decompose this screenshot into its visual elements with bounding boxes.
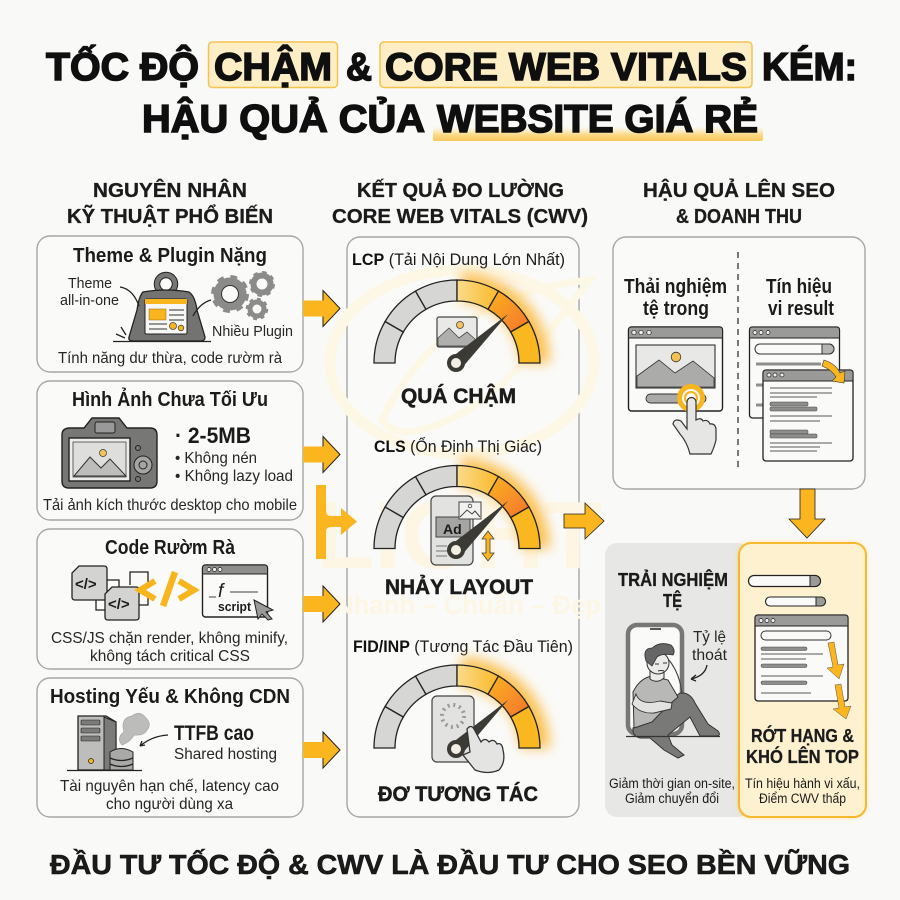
- arrow: to phone: [691, 665, 707, 681]
- panel: bad experience: Tỷ lệ: [693, 629, 726, 646]
- panel content: images: Hình Ảnh Chưa Tối Ưu: [72, 388, 268, 411]
- panel content: code: [51, 537, 288, 665]
- heading: causes column: KỸ THUẬT PHỔ BIẾN: [67, 204, 273, 228]
- icon: phone: [628, 625, 682, 734]
- panel: ranking drop: Điểm CWV thấp: [759, 791, 846, 806]
- arrow: cwv to consequences: [564, 503, 604, 539]
- icon: search result windows: [750, 327, 853, 461]
- panel: bad experience: TRẢI NGHIỆM: [618, 569, 728, 590]
- heading: cwv column: [332, 178, 588, 228]
- panel content: code: không tách critical CSS: [90, 648, 250, 665]
- panel content: images: • Không nén: [175, 450, 257, 467]
- panel: seo consequences: vi result: [768, 298, 834, 320]
- title: CORE WEB VITALS: [385, 46, 747, 89]
- panel: seo consequences: Thải nghiệm: [624, 276, 727, 298]
- watermark logo: LIGHT: [316, 482, 602, 589]
- far leg and hip: [633, 693, 719, 758]
- panel: causes 4 background: [37, 678, 303, 817]
- highlight box: chậm: [208, 42, 338, 88]
- heading: causes column: NGUYÊN NHÂN: [93, 178, 247, 202]
- face: [647, 652, 669, 674]
- panel content: code: Code Rườm Rà: [105, 537, 236, 559]
- heading: cwv column: KẾT QUẢ ĐO LƯỜNG: [357, 178, 564, 202]
- panel: causes 2 background: [37, 381, 303, 520]
- icon: orange code brackets: [140, 572, 194, 606]
- title: WEBSITE GIÁ RẺ: [437, 97, 758, 141]
- watermark logo: Nhanh – Chuẩn – Đẹp: [335, 590, 601, 620]
- arrow: down to outcomes: [789, 489, 825, 538]
- panel content: code: CSS/JS chặn render, không minify,: [51, 630, 288, 647]
- title: [46, 42, 857, 141]
- gauge section: LCP: QUÁ CHẬM: [401, 383, 516, 408]
- icon: vertical double arrow: [482, 531, 494, 561]
- highlight box: core web vitals: [380, 42, 752, 88]
- panel: bad experience: thoát: [692, 647, 728, 664]
- title: KÉM:: [762, 45, 857, 89]
- panel: ranking drop: RỚT HẠNG &: [751, 725, 854, 746]
- panel: ranking drop: KHÓ LÊN TOP: [746, 746, 859, 767]
- panel content: images: [43, 388, 297, 514]
- panel content: hosting: Shared hosting: [174, 746, 277, 763]
- icon: tapping hand: [463, 726, 504, 772]
- panel: core web vitals background: [347, 237, 579, 817]
- panel content: hosting: Tài nguyên hạn chế, latency cao: [60, 778, 279, 795]
- facial features: [655, 663, 667, 671]
- arrow: code to cwv: [303, 586, 340, 622]
- raised arm: [669, 660, 682, 694]
- icon: server with smoke and database: [67, 713, 168, 770]
- gauge section: CLS: NHẢY LAYOUT: [385, 574, 533, 599]
- gauge: CLS: [374, 466, 540, 565]
- gauge section: LCP: [352, 251, 565, 408]
- panel content: theme and plugin: [58, 245, 293, 367]
- icon: document with ad: Ad: [443, 521, 462, 537]
- title: HẬU QUẢ CỦA: [142, 97, 425, 141]
- panel content: theme and plugin: all-in-one: [60, 292, 119, 309]
- underline highlight: website giá rẻ: [433, 126, 763, 141]
- shirt torso: [633, 676, 678, 728]
- icon: code files: </>: [108, 596, 130, 613]
- panel: seo consequences: [613, 237, 865, 489]
- gauge section: FID/INP: ĐƠ TƯƠNG TÁC: [378, 781, 538, 806]
- icon: gears: [214, 273, 273, 318]
- gauge section: FID/INP: [353, 638, 573, 806]
- gauge section: CLS: CLS (Ổn Định Thị Giác): [374, 437, 542, 456]
- panel content: images: • Không lazy load: [175, 468, 293, 485]
- panel: bad experience: [605, 543, 750, 817]
- arrow: theme to cwv: [303, 290, 340, 326]
- panel: bad experience: Giảm thời gian on-site,: [609, 776, 735, 791]
- icon: loading panel: [432, 696, 474, 762]
- panel content: theme and plugin: Nhiều Plugin: [212, 323, 293, 340]
- title: &: [346, 46, 372, 89]
- icon: falling yellow arrows: [827, 642, 851, 719]
- gauge section: LCP: LCP (Tải Nội Dung Lớn Nhất): [352, 251, 565, 269]
- panel content: theme and plugin: Tính năng dư thừa, code rườm rà: [58, 350, 282, 367]
- panel: ranking drop: Tín hiệu hành vi xấu,: [745, 776, 860, 791]
- title: CHẬM: [214, 45, 332, 89]
- panel content: hosting: cho người dùng xa: [106, 796, 233, 813]
- icon: code files: </>: [75, 576, 97, 593]
- panel content: hosting: TTFB cao: [174, 722, 254, 745]
- icon: results window: [755, 615, 848, 701]
- panel: seo consequences: tệ trong: [643, 298, 709, 320]
- arrow: merging bracket to cwv: [316, 485, 357, 559]
- heading: consequences column: [643, 178, 835, 228]
- panel content: images: · 2-5MB: [175, 423, 251, 448]
- hair: [645, 644, 674, 666]
- gauge section: FID/INP: FID/INP (Tương Tác Đầu Tiên): [353, 638, 573, 656]
- arrow: images to cwv: [303, 436, 340, 472]
- icon: script window: script: [218, 600, 252, 614]
- icon: script window: f: [218, 581, 225, 602]
- panel: ranking drop: [738, 543, 866, 817]
- arrow: hosting to cwv: [303, 732, 340, 768]
- icon: image: [437, 317, 477, 347]
- gauge section: CLS: [374, 437, 542, 599]
- panel content: theme and plugin: Theme: [68, 275, 112, 292]
- icon: search bars: [748, 576, 826, 606]
- icon: script window: [202, 565, 273, 620]
- panel content: images: Tải ảnh kích thước desktop cho mobile: [43, 497, 297, 514]
- icon: weight: [113, 275, 211, 342]
- heading: cwv column: CORE WEB VITALS (CWV): [332, 205, 588, 228]
- resting arm: [632, 694, 672, 713]
- heading: causes column: [67, 178, 273, 228]
- gauge: FID/INP: [374, 665, 540, 772]
- panel: bad experience: TỆ: [663, 590, 682, 611]
- icon: browser with tap: [628, 327, 722, 454]
- panel content: theme and plugin: Theme & Plugin Nặng: [73, 245, 267, 267]
- icon: code files: [72, 566, 148, 620]
- panel: bad experience: Giảm chuyển đổi: [625, 791, 719, 806]
- panel content: hosting: Hosting Yếu & Không CDN: [50, 686, 290, 708]
- title: TỐC ĐỘ: [46, 44, 199, 89]
- icon: sad person sitting: [626, 644, 720, 758]
- panel: causes 3 background: [37, 529, 303, 669]
- panel: causes 1 background: [37, 236, 303, 372]
- heading: consequences column: HẬU QUẢ LÊN SEO: [643, 178, 835, 202]
- neck: [650, 668, 664, 681]
- panel content: hosting: [50, 686, 290, 813]
- gauge: LCP: [374, 280, 540, 370]
- heading: consequences column: & DOANH THU: [676, 205, 802, 228]
- icon: document with ad: [431, 496, 481, 565]
- icon: camera: [62, 418, 157, 488]
- watermark logo: [316, 270, 602, 620]
- panel: seo consequences: Tín hiệu: [766, 276, 832, 298]
- footer message: ĐẦU TƯ TỐC ĐỘ & CWV LÀ ĐẦU TƯ CHO SEO BỀN VỮNG: [50, 848, 850, 880]
